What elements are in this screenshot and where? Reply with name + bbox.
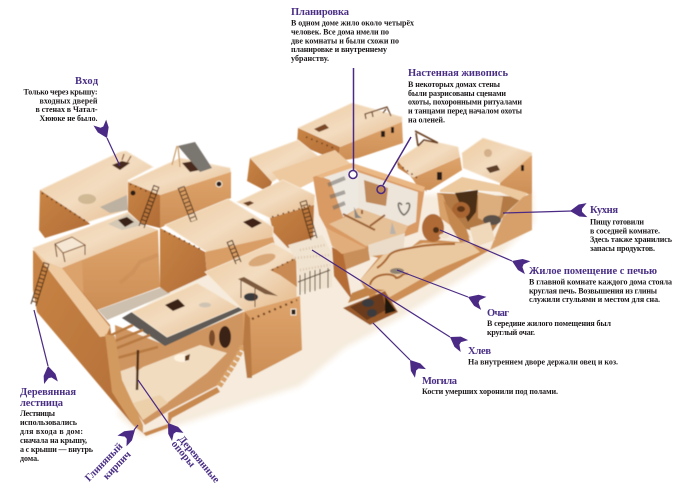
text block: Очаг	[487, 308, 612, 337]
text block: Очаг: круглый очаг.	[487, 328, 535, 337]
brick corner wall	[105, 334, 143, 433]
outer left wall	[33, 250, 143, 433]
house: front roof with awning	[205, 243, 297, 312]
house: block with awning	[128, 142, 231, 228]
text block: Настенная живопись: Настенная живопись	[408, 68, 508, 79]
house: right roof	[462, 138, 532, 195]
stairs	[219, 346, 243, 386]
arrow: Хлев	[312, 250, 468, 352]
arrow: Жилое помещение с печью	[440, 230, 530, 274]
house: middle roof behind cutaway	[237, 180, 315, 248]
text block: Планировка: планировке и внутреннему	[291, 45, 387, 54]
text block: Вход: в стенах в Чатал-	[36, 105, 98, 114]
low walls below the cutaway	[326, 228, 405, 300]
text block: Деревянная лестница: Лестницы	[20, 409, 56, 418]
text block: Кухня: Пищу готовили	[590, 218, 644, 226]
house: left back block	[39, 151, 153, 238]
text block: Кухня: Здесь также хранились	[590, 235, 673, 244]
text block: Очаг: В середине жилого помещения был	[487, 319, 612, 328]
house: roof with frame	[397, 131, 462, 192]
ladder	[31, 262, 49, 306]
text block: Очаг: Очаг	[487, 308, 509, 319]
text block: Кухня	[590, 205, 673, 253]
text block: Жилое помещение с печью: круглая печь. Возвышения из глины	[529, 286, 658, 296]
text block: Деревянная лестница: использовались	[20, 418, 78, 427]
text block: Планировка: В одном доме жило около четырёх	[291, 18, 414, 28]
text block: Могила: Кости умерших хоронили под полами.	[422, 387, 558, 396]
text block: Могила	[422, 376, 558, 396]
front tower	[243, 296, 302, 378]
text block: Планировка	[291, 7, 414, 63]
text block: Деревянная лестница: Деревянная	[20, 387, 76, 398]
rotated label: Деревянные опоры: Деревянные	[176, 434, 222, 486]
house: central block	[160, 199, 275, 293]
ladder	[300, 200, 317, 240]
text block: Жилое помещение с печью: служили стульями и местом для сна.	[529, 295, 660, 304]
arrow: Деревянная лестница	[34, 310, 58, 384]
arrow: Планировка	[349, 68, 357, 178]
text block: Настенная живопись: В некоторых домах стены	[408, 80, 501, 89]
text block: Настенная живопись: были разрисованы сценами	[408, 89, 506, 98]
text block: Планировка: человек. Все дома имели по	[291, 28, 389, 36]
text block: Вход: входных дверей	[40, 96, 98, 106]
arrow: Могила	[373, 323, 426, 378]
grave	[343, 288, 398, 325]
arrow: Очаг	[397, 270, 486, 310]
arrow: Деревянные опоры	[138, 380, 183, 441]
front courtyard house interior	[115, 312, 250, 425]
text block: Деревянная лестница	[20, 387, 94, 463]
text block: Деревянная лестница: лестница	[20, 398, 64, 409]
text block: Настенная живопись: охоты, похоронными ритуалами	[408, 98, 522, 106]
arrow: Глиняный кирпич	[117, 425, 139, 446]
text block: Вход	[24, 76, 99, 123]
text block: Хлев: На внутреннем дворе держали овец и коз.	[468, 358, 618, 366]
ladder	[178, 186, 197, 222]
text block: Вход: Только через крышу:	[24, 88, 98, 96]
courtyard	[288, 235, 332, 295]
house: upper left centre	[247, 140, 352, 192]
rotated label: Деревянные опоры: опоры	[169, 439, 197, 470]
illustration: cutaway settlement	[31, 103, 534, 437]
text block: Жилое помещение с печью	[529, 266, 672, 304]
text block: Хлев	[468, 346, 618, 366]
arrow: Вход	[93, 120, 120, 166]
text block: Вход: Вход	[75, 76, 99, 87]
text block: Деревянная лестница: а с крыши — внутрь	[20, 445, 94, 454]
wall top band	[33, 248, 110, 337]
cutaway house with painted walls	[313, 163, 425, 250]
text block: Планировка: Планировка	[291, 7, 350, 18]
ladder	[139, 185, 159, 228]
text block: Деревянная лестница: дома.	[20, 454, 39, 463]
text block: Кухня: Кухня	[590, 205, 618, 216]
text block: Настенная живопись: на оленей.	[408, 116, 445, 124]
arrow: Настенная живопись	[377, 137, 411, 194]
house: back roof with table	[297, 103, 403, 161]
text block: Деревянная лестница: сначала на крышу,	[20, 436, 87, 445]
ladder	[227, 240, 241, 264]
text block: Могила: Могила	[422, 376, 458, 387]
kitchen	[437, 177, 532, 250]
text block: Хлев: Хлев	[468, 346, 491, 357]
text block: Кухня: в соседней комнате.	[590, 226, 660, 236]
text block: Деревянная лестница: для входа в дом:	[20, 427, 83, 436]
text block: Настенная живопись	[408, 68, 523, 124]
living room with oven	[360, 200, 490, 302]
low front wall	[143, 387, 220, 436]
rotated label: Глиняный кирпич: кирпич	[101, 449, 134, 482]
text block: Жилое помещение с печью: Жилое помещение с печью	[529, 266, 657, 277]
text block: Вход: Хююке не было.	[40, 114, 98, 123]
rotated label: Глиняный кирпич: Глиняный	[83, 441, 125, 484]
text block: Планировка: две комнаты и были схожи по	[291, 36, 399, 46]
text block: Планировка: убранству.	[291, 54, 329, 63]
arrow: Кухня	[503, 203, 587, 218]
wooden beams and roof	[105, 283, 243, 358]
text block: Кухня: запасы продуктов.	[590, 244, 655, 253]
ground shadow	[118, 190, 534, 437]
text block: Жилое помещение с печью: В главной комнате каждого дома стояла	[529, 278, 672, 286]
house: left large roof	[33, 212, 170, 320]
text block: Настенная живопись: и танцами перед началом охоты	[408, 106, 523, 116]
wooden support post	[137, 350, 138, 390]
